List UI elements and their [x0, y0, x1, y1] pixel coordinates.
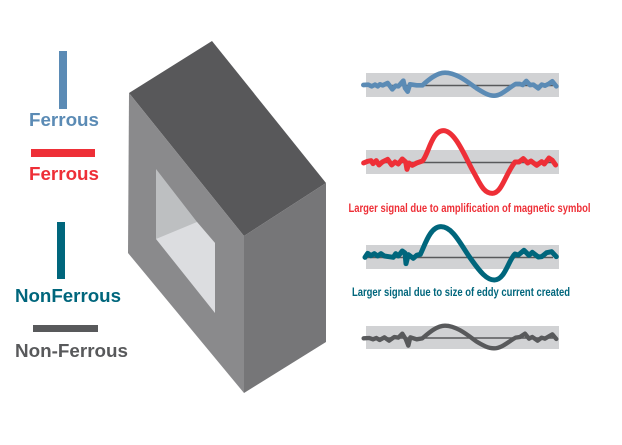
signal 3: nonferrous teal: [365, 227, 559, 280]
legend: ferrous horizontal: [29, 149, 99, 184]
caption: eddy current: Larger signal due to size of eddy current created: [352, 285, 570, 299]
legend: nonferrous vertical: NonFerrous: [15, 286, 121, 306]
signal 4: non-ferrous gray: [364, 326, 559, 349]
legend: ferrous vertical: [29, 51, 99, 130]
block top face: [129, 41, 326, 236]
window back wall: [156, 169, 215, 243]
window floor: [156, 222, 215, 313]
signal 2: ferrous red: [364, 131, 559, 193]
legend: ferrous vertical: Ferrous: [29, 110, 99, 130]
legend: ferrous horizontal: Ferrous: [29, 164, 99, 184]
block side face: [244, 183, 326, 393]
legend: non-ferrous horizontal: [15, 325, 128, 361]
legend: non-ferrous horizontal: Non-Ferrous: [15, 341, 128, 361]
3D block with window: [128, 41, 326, 393]
signal 1: ferrous blue: [363, 73, 559, 97]
block front face: [128, 93, 244, 393]
legend: nonferrous vertical: [15, 222, 121, 306]
